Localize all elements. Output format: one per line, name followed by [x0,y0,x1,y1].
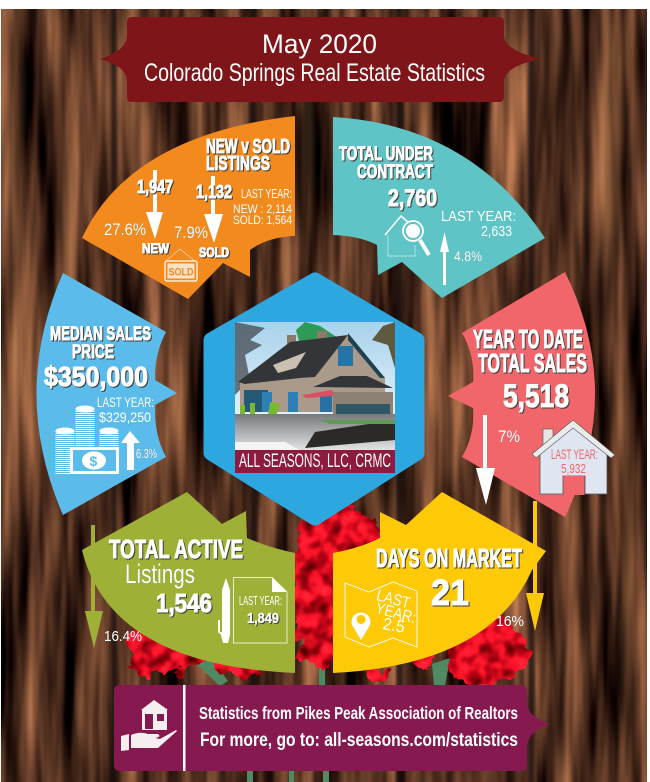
last year label: LAST YEAR: [241,187,292,201]
last year value: 5,932 [561,461,586,476]
arrow: sold listings [204,176,223,243]
heading: total active: TOTAL ACTIVE [109,534,243,564]
panel: total active listings [82,492,295,673]
last year new: NEW : 2,114 [233,202,292,216]
title: date: May 2020 [262,29,377,59]
last year value: $329,250 [99,409,151,425]
heading: median sales: MEDIAN SALES [50,324,151,345]
map text: 2.5: 2.5 [381,614,406,637]
heading: total under: TOTAL UNDER [339,144,433,165]
heading: new v sold: NEW v SOLD [206,136,290,158]
heading: days on market: DAYS ON MARKET [376,543,522,573]
last year label: LAST YEAR: [551,446,598,462]
icon: house and magnifier [385,216,429,256]
panel: central hexagon logo [211,280,417,518]
arrow: up [121,431,140,470]
icon: coins and banknote: $ [90,453,98,469]
icon: map [345,582,417,647]
icon: pen [218,578,230,643]
value: 2,760: 2,760 [388,185,437,212]
title banner [100,17,541,102]
panel: total under contract [333,117,545,298]
arrow: down [85,525,103,648]
label sold: SOLD [199,244,229,260]
icon: coins and banknote [56,406,119,475]
last year label: LAST YEAR: [441,208,516,225]
map text: last: LAST [374,587,412,612]
last year sold: SOLD: 1,564 [233,213,292,227]
icon: house in hand [121,700,177,751]
percent change: 6.3% [136,446,157,461]
value: active listings: 1,546 [156,588,212,618]
value: new 1,947: 1,947 [137,177,173,197]
logo: name text: ALL SEASONS, LLC, CRMC [239,451,391,472]
heading: listings: Listings [125,559,195,589]
map text: year: YEAR: [374,600,418,627]
percent change: 16.4% [104,628,142,645]
value: days: 21 [431,572,469,613]
last year value: 1,849 [247,610,279,627]
last year value: 2,633 [481,223,512,240]
footer line 1: Statistics from Pikes Peak Association of Realtors [199,703,518,723]
value: total sales: 5,518 [503,378,569,414]
arrow: new listings [146,170,163,239]
label new: NEW [142,240,170,256]
icon: sold sign: SOLD [168,266,194,278]
footer banner [114,685,550,771]
icon: map pin [352,612,370,640]
panel: median sales price [36,273,177,515]
heading: listings: LISTINGS [206,153,270,175]
percent change: 16% [496,613,524,630]
title: subtitle: Colorado Springs Real Estate Statistics [144,59,485,87]
percent sold: 7.9% [174,223,208,242]
icon: house with last year [532,420,615,495]
heading: contract: CONTRACT [357,162,433,183]
heading: price: PRICE [72,342,114,363]
logo: name bar [235,450,395,473]
red carnation flowers [128,510,531,782]
value: median price: $350,000 [44,361,148,392]
logo: house illustration [235,322,395,450]
footer line 2: For more, go to: all-seasons.com/statistics [200,730,518,751]
panel: year to date total sales [448,272,615,517]
last year label: LAST YEAR: [239,593,282,608]
icon: document [234,578,287,643]
last year label: LAST YEAR: [97,394,154,410]
footer divider [183,685,186,771]
document corner [272,577,287,592]
panel: days on market [333,492,546,673]
arrow: down [476,415,495,505]
arrow: up [440,232,449,285]
percent change: 7% [498,427,520,446]
panel: new v sold listings [82,116,295,299]
flower stems [190,654,450,782]
percent change: 4.8% [454,248,482,264]
arrow: days on market down [526,501,544,631]
percent new: 27.6% [104,220,146,239]
icon: sold sign [165,249,197,281]
value: sold 1,132: 1,132 [196,182,232,202]
